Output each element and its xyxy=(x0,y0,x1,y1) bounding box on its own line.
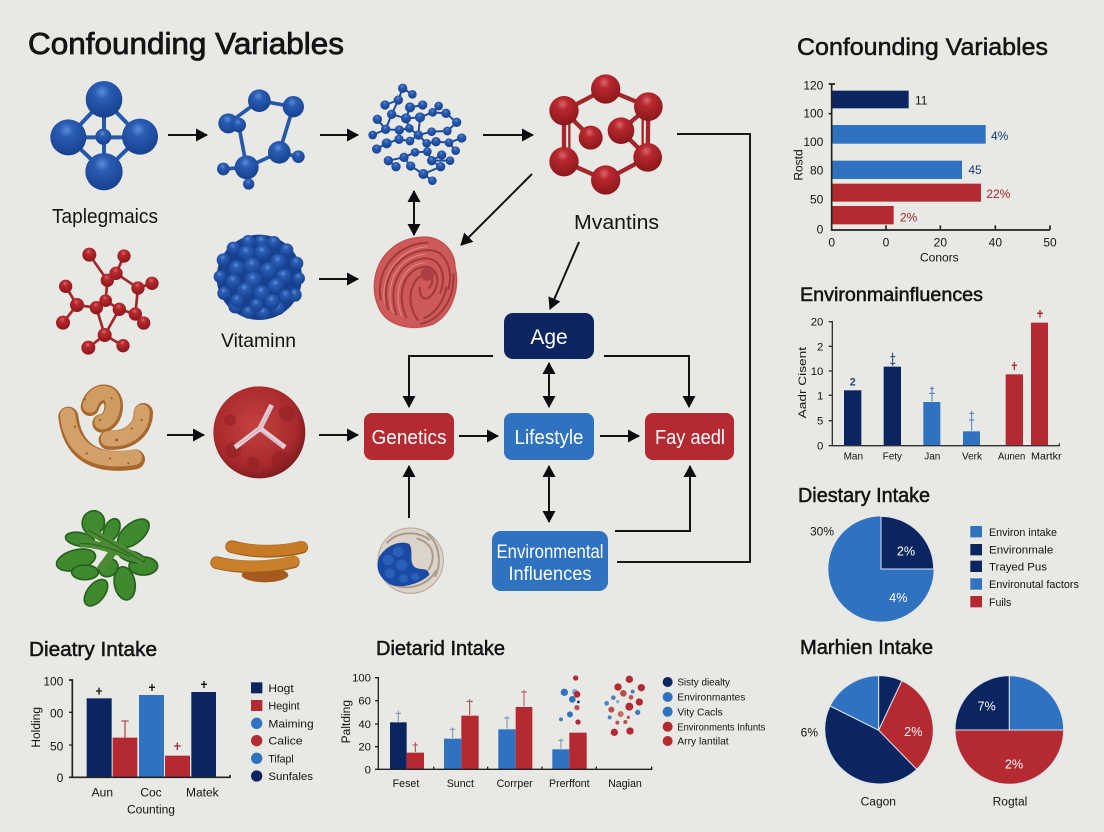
legend: Fuils xyxy=(989,597,1012,609)
bar chart: horizontal bars: 22% xyxy=(986,187,1011,201)
bar chart: horizontal bars: 100 xyxy=(803,107,824,121)
pie chart: Rogtal xyxy=(955,676,1064,809)
bar chart: Matek xyxy=(186,786,220,800)
bar chart: vertical bars: 2 xyxy=(817,341,823,353)
arrow: Age to Lifestyle xyxy=(548,363,550,407)
bar chart: vertical bars: Aadr Cisent xyxy=(797,346,809,418)
heading: Dieatry Intake: Dieatry Intake xyxy=(29,639,157,661)
legend: Environments Infunts xyxy=(677,722,765,733)
bar chart: 50 xyxy=(50,739,64,753)
bar chart: horizontal bars: 0 xyxy=(817,222,824,236)
icon: blue molecule ring xyxy=(217,89,305,190)
legend: Sunfales xyxy=(268,771,314,783)
bar chart xyxy=(29,674,230,816)
legend: Vity Cacls xyxy=(677,707,723,718)
heading: Marhien Intake: Marhien Intake xyxy=(800,637,933,659)
arrow: molecule 3 to swirl xyxy=(413,191,415,235)
icon: vitamin sphere xyxy=(214,235,305,320)
bar chart: Corrper xyxy=(497,778,533,790)
bar chart: horizontal bars: 50 xyxy=(1043,236,1057,250)
bar chart: 100 xyxy=(352,673,371,685)
icon: red sphere xyxy=(213,386,305,478)
bar chart: vertical bars: Jan xyxy=(924,451,940,462)
bar chart: vertical bars: Martkr xyxy=(1031,451,1062,462)
box: Environmental Influences: Environmental xyxy=(496,542,604,563)
legend xyxy=(970,526,1079,609)
pie chart: Cagon: 2% xyxy=(904,725,922,739)
icon: blue molecule network xyxy=(368,84,466,185)
bar chart: 100 xyxy=(43,674,64,688)
bar chart: Nagian xyxy=(608,778,642,790)
bar chart: vertical bars: Man xyxy=(844,451,863,462)
legend: Hogt xyxy=(268,683,294,695)
box: Genetics: Genetics xyxy=(372,427,446,449)
bar chart: horizontal bars: 20 xyxy=(934,236,947,250)
legend: Environutal factors xyxy=(989,579,1079,591)
bar chart: horizontal bars: 11 xyxy=(915,94,928,108)
bar chart: Feset xyxy=(393,778,419,790)
bar chart: horizontal bars: 100 xyxy=(803,135,824,149)
arrow: Lifestyle to Environmental Influences xyxy=(548,466,550,522)
pie chart: Rogtal: 7% xyxy=(978,699,996,713)
icon: red ring molecule xyxy=(549,74,663,195)
bar chart: Sunct xyxy=(447,778,474,790)
icon: blue molecule large xyxy=(50,81,158,190)
bar chart: Prerffont xyxy=(549,778,590,790)
legend xyxy=(251,682,314,783)
arrow: molecule 4 to swirl xyxy=(461,174,532,245)
box: Age: Age xyxy=(530,326,568,349)
bar chart: vertical bars xyxy=(797,310,1062,462)
arrow: vitamin to swirl xyxy=(319,278,358,280)
bar chart: horizontal bars: 0 xyxy=(828,236,835,250)
arrow: red sphere to Genetics xyxy=(319,434,358,436)
bar chart: horizontal bars: 0 xyxy=(883,236,890,250)
bar chart: 20 xyxy=(358,742,371,754)
bar chart: vertical bars: 20 xyxy=(811,317,823,329)
bar chart: horizontal bars xyxy=(792,78,1057,265)
bar chart: horizontal bars: 45 xyxy=(968,163,982,177)
arrow: Lifestyle to Fay aedl xyxy=(600,435,639,437)
panel: marhien intake pies xyxy=(800,637,1064,809)
legend: Calice xyxy=(268,736,303,748)
pie chart: 30% xyxy=(810,525,834,539)
bar chart: vertical bars: 10 xyxy=(811,366,823,378)
legend: Maiming xyxy=(268,719,314,731)
bar chart: 60 xyxy=(358,696,371,708)
box: Environmental Influences xyxy=(492,531,608,591)
bar chart: 0 xyxy=(365,764,371,776)
arrow: Environmental Influences to Fay aedl xyxy=(615,466,690,531)
arrow: molecule 2 to 3 xyxy=(320,134,358,136)
heading: Diestary Intake: Diestary Intake xyxy=(798,485,930,507)
box: Genetics xyxy=(364,413,454,460)
bar chart: Paltding xyxy=(339,700,353,743)
bar chart: horizontal bars: 2% xyxy=(900,210,918,224)
bar chart: Counting xyxy=(127,802,175,816)
legend: Hegint xyxy=(268,700,300,712)
legend: Sisty diealty xyxy=(677,678,730,689)
legend: Environ intake xyxy=(989,527,1057,539)
panel: horizontal bar chart xyxy=(792,34,1057,265)
legend: Trayed Pus xyxy=(989,562,1048,574)
pie chart: Rogtal: Rogtal xyxy=(993,795,1027,809)
box: Lifestyle: Lifestyle xyxy=(514,427,584,449)
bar chart: Holding xyxy=(29,707,43,748)
pie chart: Cagon: Cagon xyxy=(861,795,896,809)
arrow: Genetics to Lifestyle xyxy=(459,435,498,437)
heading: Environmainfluences: Environmainfluences xyxy=(800,285,983,306)
pie chart xyxy=(810,516,934,622)
bar chart: Coc xyxy=(140,786,162,800)
bar chart: horizontal bars: 50 xyxy=(810,192,824,206)
icon: green beans xyxy=(54,508,158,610)
legend: Arry lantilat xyxy=(677,737,729,748)
arrow: Age to Fay aedl xyxy=(604,356,689,407)
bar chart: 40 xyxy=(358,719,371,731)
legend xyxy=(663,677,765,748)
icon: orange slices xyxy=(217,547,302,582)
arrow: Mvantins to Age xyxy=(550,242,579,309)
heading: Dietarid Intake: Dietarid Intake xyxy=(376,638,505,660)
pie chart: 4% xyxy=(889,591,907,605)
pie chart: Cagon: 6% xyxy=(801,726,818,740)
bar chart: horizontal bars: 80 xyxy=(810,163,824,177)
arrow: Age to Genetics xyxy=(409,356,493,407)
bar chart: vertical bars: Aunen xyxy=(998,451,1025,462)
bar chart: vertical bars: Verk xyxy=(962,451,982,462)
bar chart: horizontal bars: 40 xyxy=(989,236,1002,250)
box: Fay aedl: Fay aedl xyxy=(655,427,725,449)
pie chart: 2% xyxy=(897,544,915,558)
bar chart: 0 xyxy=(57,771,64,785)
scatter cluster xyxy=(604,676,645,736)
icon: blue and cream cluster xyxy=(377,528,443,593)
label: Mvantins: Mvantins xyxy=(574,212,659,234)
bar chart: vertical bars: Fety xyxy=(883,451,902,462)
legend: Environmantes xyxy=(677,693,745,704)
panel: dietary intake pie xyxy=(798,485,1079,622)
pie chart: Cagon xyxy=(801,676,933,809)
bar chart: 00 xyxy=(50,707,64,721)
bar chart xyxy=(339,673,652,790)
legend: Environmale xyxy=(989,545,1053,557)
connector: molecule 4 to environmental influences xyxy=(617,134,750,562)
bar chart: Aun xyxy=(92,786,113,800)
pie chart: Rogtal: 2% xyxy=(1005,757,1023,771)
icon: potatoes xyxy=(68,393,143,464)
heading: Confounding Variables: Confounding Variables xyxy=(797,34,1048,61)
bar chart: vertical bars: 1 xyxy=(817,390,823,402)
arrow: cluster to Genetics xyxy=(408,466,410,518)
arrow: molecule 3 to 4 xyxy=(483,134,533,136)
title: Confounding Variables xyxy=(28,26,344,61)
bar chart: vertical bars: 5 xyxy=(817,416,823,428)
arrow: molecule 1 to 2 xyxy=(168,134,207,136)
label: Taplegmaics: Taplegmaics xyxy=(52,206,158,228)
box: Lifestyle xyxy=(504,413,594,460)
bar chart: horizontal bars: Conors xyxy=(920,251,959,265)
box: Age xyxy=(504,313,594,359)
icon: red branched molecule xyxy=(56,248,159,355)
bar chart: vertical bars: 0 xyxy=(817,441,823,453)
arrow: potatoes to red sphere xyxy=(167,434,204,436)
bar chart: horizontal bars: 4% xyxy=(991,129,1009,143)
bar chart: vertical bars: 2 xyxy=(850,376,856,388)
box: Fay aedl xyxy=(645,413,734,460)
panel: environmental influences bar chart xyxy=(797,285,1062,462)
bar chart: horizontal bars: 120 xyxy=(803,78,824,92)
panel: dieatry intake chart xyxy=(29,639,314,816)
panel: dietarid intake chart xyxy=(339,638,765,790)
icon: red swirl xyxy=(374,237,457,327)
legend: Tifapl xyxy=(268,753,294,765)
box: Environmental Influences: Influences xyxy=(508,564,592,585)
label: Vitaminn: Vitaminn xyxy=(221,331,296,352)
bar chart: horizontal bars: Rostd xyxy=(792,149,806,181)
